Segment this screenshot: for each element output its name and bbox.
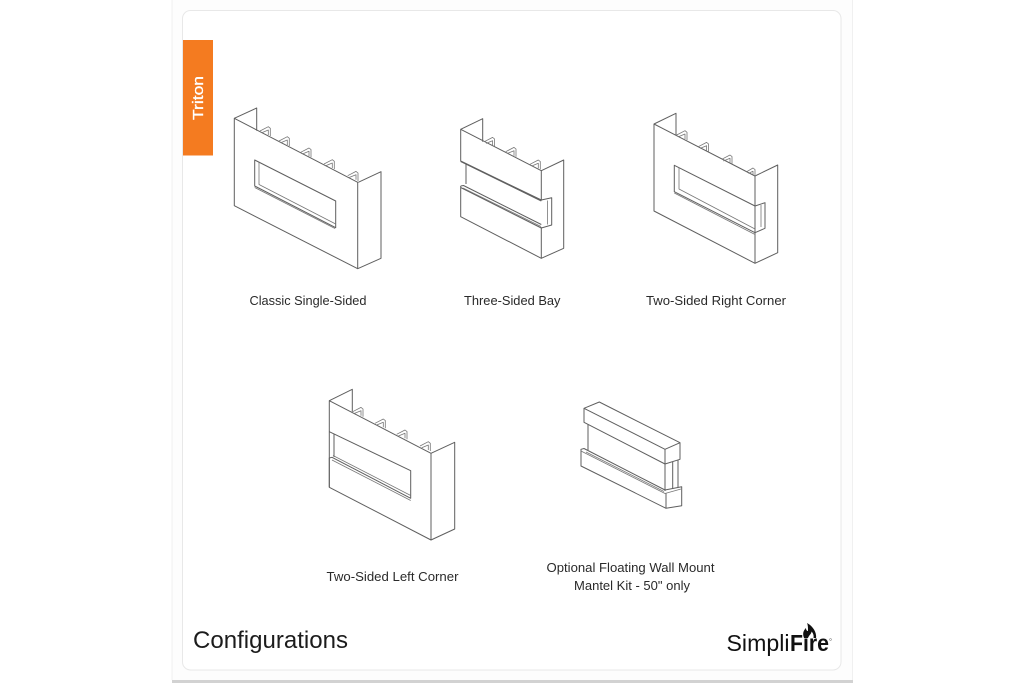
studs bbox=[677, 131, 755, 175]
diagram: classic single-sided bbox=[234, 108, 381, 269]
heading: Configurations: Configurations bbox=[193, 627, 348, 654]
label: classic single-sided: Classic Single-Sided bbox=[250, 293, 366, 308]
logo: SimpliFire bbox=[726, 623, 832, 656]
label: two-sided right corner: Two-Sided Right Corner bbox=[646, 293, 787, 308]
diagram: two-sided left corner bbox=[329, 389, 455, 540]
outer page panel bbox=[172, 0, 853, 683]
diagram: three-sided bay bbox=[461, 119, 564, 258]
studs bbox=[260, 127, 358, 181]
icon: flame bbox=[803, 623, 816, 638]
studs bbox=[484, 137, 540, 169]
tab: Triton bbox=[183, 40, 213, 156]
content card bbox=[182, 10, 841, 670]
label: floating wall mount mantel kit: Mantel Kit - 50" only bbox=[574, 578, 690, 593]
label: three-sided bay: Three-Sided Bay bbox=[464, 293, 561, 308]
diagram: two-sided right corner bbox=[654, 113, 778, 263]
label: floating wall mount mantel kit: Optional Floating Wall Mount bbox=[546, 560, 715, 575]
logo: SimpliFire: Simpli bbox=[726, 630, 790, 656]
tab: Triton: Triton bbox=[190, 76, 207, 120]
studs bbox=[353, 407, 430, 451]
logo: SimpliFire: Fire bbox=[790, 630, 829, 656]
diagram: floating wall mount mantel kit bbox=[581, 402, 682, 508]
label: floating wall mount mantel kit bbox=[546, 560, 715, 593]
label: two-sided left corner: Two-Sided Left Corner bbox=[326, 569, 459, 584]
